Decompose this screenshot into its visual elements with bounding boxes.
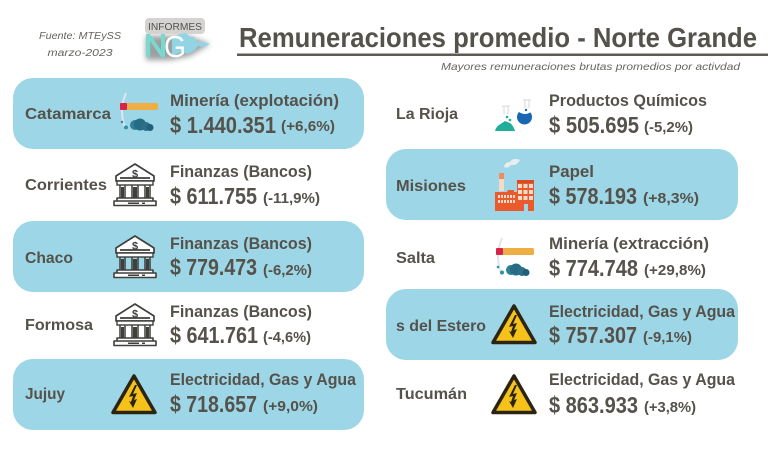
panel: Jujuy: [13, 359, 364, 430]
icon: pickaxe: [120, 93, 158, 131]
row: Tucumán: Tucumán: [396, 386, 467, 403]
panel: Chaco: (-6,2%): [263, 262, 312, 279]
panel: Chaco: Finanzas (Bancos): [170, 234, 312, 253]
row: Salta: (+29,8%): [644, 262, 706, 279]
icon: high voltage: [113, 376, 155, 412]
row: Tucumán: Electricidad, Gas y Agua: [549, 370, 735, 389]
row: Salta: $ 774.748: [549, 255, 638, 281]
icon: high voltage: [493, 306, 535, 342]
panel: Jujuy: Jujuy: [25, 386, 65, 403]
icon: pickaxe: [496, 238, 534, 276]
panel: Misiones: Papel: [549, 162, 594, 181]
panel: Jujuy: Electricidad, Gas y Agua: [170, 370, 356, 389]
row: Tucumán: (+3,8%): [644, 399, 696, 416]
panel: Chaco: $ 779.473: [170, 254, 257, 280]
icon: factory: [495, 159, 534, 211]
icon: high voltage: [493, 376, 535, 412]
panel: Chaco: Chaco: [25, 250, 73, 267]
panel: Santiago del Estero: [386, 289, 738, 360]
row: Corrientes: [25, 162, 320, 209]
panel: Catamarca: [13, 78, 364, 149]
logo: Informes NG: [145, 18, 210, 64]
panel: Catamarca: (+6,6%): [281, 118, 335, 135]
row: Corrientes: Corrientes: [25, 177, 107, 194]
panel: Chaco: [13, 221, 364, 292]
icon: chemistry flasks: [495, 100, 532, 131]
row: Formosa: Formosa: [25, 317, 93, 334]
panel: Misiones: (+8,3%): [643, 190, 699, 207]
source note: Fuente: MTEySS: [39, 31, 121, 42]
logo: Informes NG: G: [164, 29, 186, 64]
source note: marzo-2023: [48, 48, 113, 59]
title rule: [237, 54, 768, 56]
panel: Jujuy: (+9,0%): [263, 398, 318, 415]
row: Corrientes: $ 611.755: [170, 183, 257, 209]
row: La Rioja: $ 505.695: [549, 112, 639, 138]
panel: Misiones: [386, 149, 738, 220]
panel: Santiago del Estero: (-9,1%): [643, 329, 692, 346]
icon: bank: [114, 236, 156, 278]
row: La Rioja: Productos Químicos: [549, 91, 707, 110]
row: Salta: Minería (extracción): [549, 234, 709, 253]
subtitle: Mayores remuneraciones brutas promedios por activdad: [441, 61, 741, 73]
source note: [39, 31, 121, 59]
row: Corrientes: Finanzas (Bancos): [170, 162, 312, 181]
row: La Rioja: La Rioja: [396, 106, 458, 123]
row: Salta: [396, 234, 709, 281]
row: Formosa: (-4,6%): [263, 329, 311, 346]
row: Formosa: Finanzas (Bancos): [170, 302, 312, 321]
panel: Misiones: $ 578.193: [549, 183, 637, 209]
row: La Rioja: (-5,2%): [644, 119, 693, 136]
row: Formosa: $ 641.761: [170, 322, 258, 348]
icon: bank: [114, 304, 156, 346]
icon: bank: [114, 164, 156, 206]
row: Tucumán: [396, 370, 735, 418]
row: Salta: Salta: [396, 250, 435, 267]
panel: Catamarca: Minería (explotación): [170, 91, 339, 110]
row: Corrientes: (-11,9%): [263, 190, 320, 207]
panel: Catamarca: Catamarca: [25, 106, 111, 123]
panel: Misiones: Misiones: [396, 178, 466, 195]
row: Tucumán: $ 863.933: [549, 392, 638, 418]
panel: Santiago del Estero: Electricidad, Gas y Agua: [549, 302, 735, 321]
row: La Rioja: [396, 91, 707, 138]
logo: Informes NG: INFORMES: [148, 21, 202, 33]
panel: Catamarca: $ 1.440.351: [170, 112, 276, 138]
panel: Santiago del Estero: $ 757.307: [549, 322, 637, 348]
panel: Santiago del Estero: s del Estero: [396, 318, 486, 335]
panel: Jujuy: $ 718.657: [170, 391, 257, 417]
row: Formosa: [25, 302, 312, 348]
